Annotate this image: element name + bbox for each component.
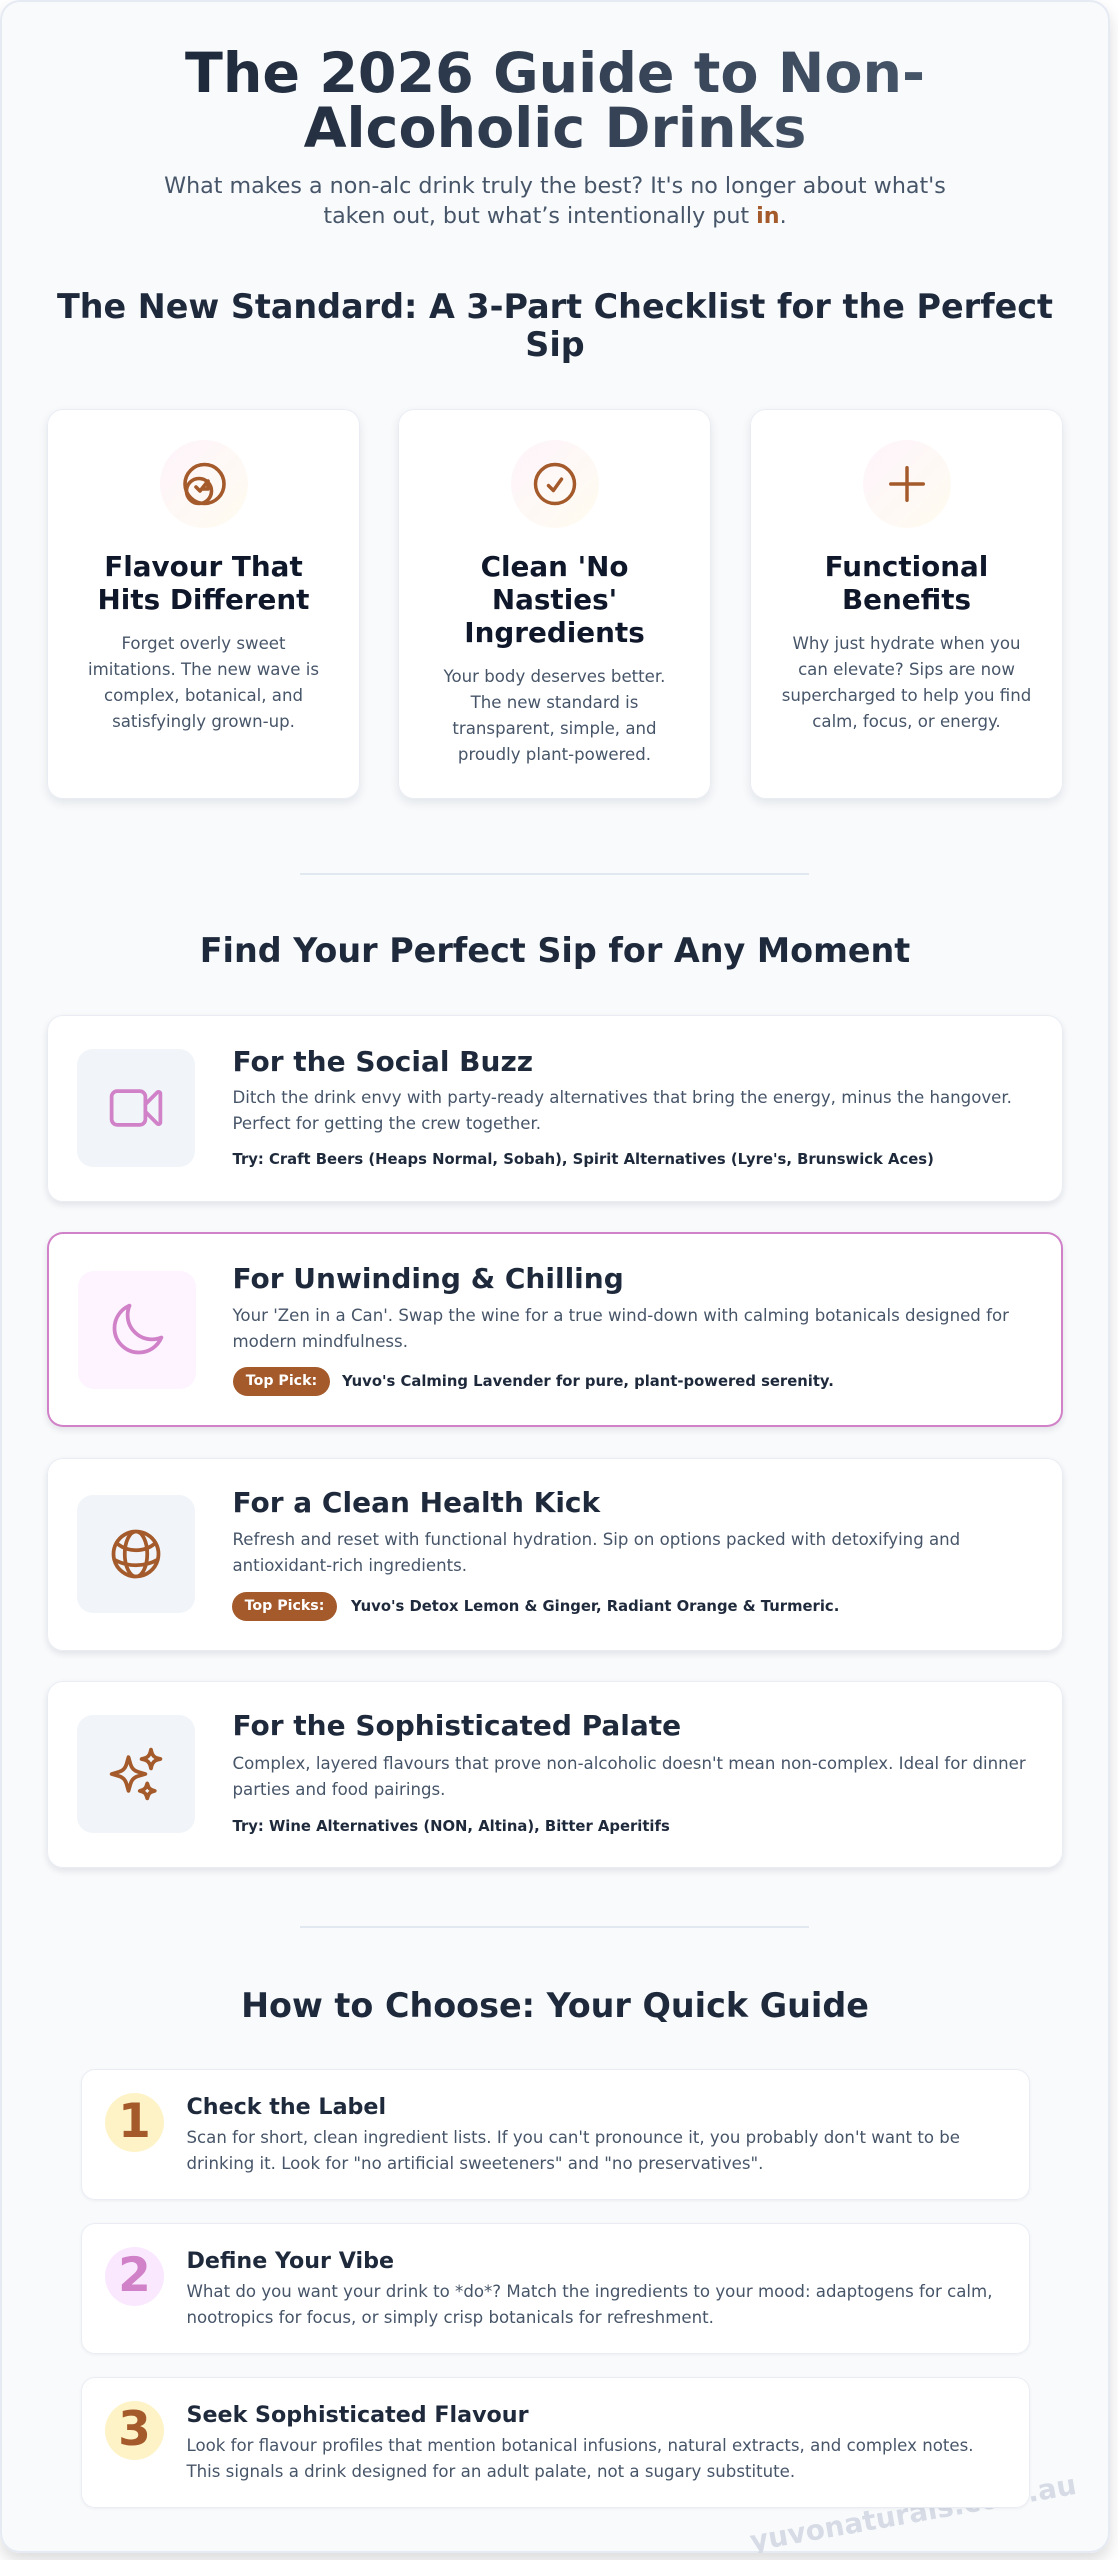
description: Your 'Zen in a Can'. Swap the wine for a true wind-down with calming botanicals designed for: [232, 1306, 1009, 1325]
description: [232, 1530, 960, 1575]
title: The 2026 Guide to Non-: [185, 41, 925, 106]
icon: flavour circle check: [160, 440, 248, 528]
icon background: [510, 440, 598, 528]
top pick badge: [233, 1367, 330, 1396]
card text: Why just hydrate when you: [792, 634, 1020, 653]
step text: What do you want your drink to *do*? Match the ingredients to your mood: adaptogens for calm,: [186, 2282, 992, 2301]
card heading: [98, 550, 309, 616]
top pick text: Yuvo's Calming Lavender for pure, plant-powered serenity.: [342, 1373, 834, 1390]
card text: can elevate? Sips are now: [798, 660, 1015, 679]
description: Ditch the drink envy with party-ready alternatives that bring the energy, minus the hangover.: [232, 1088, 1012, 1107]
heading: new standard: Sip: [525, 325, 585, 364]
card text: supercharged to help you find: [782, 686, 1031, 705]
card heading: [825, 550, 988, 616]
number 3: 3: [118, 2402, 151, 2456]
heading: new standard: [57, 287, 1053, 364]
step 1: [81, 2069, 1030, 2200]
number 1: 1: [118, 2094, 151, 2149]
card text: imitations. The new wave is: [88, 660, 319, 679]
panel: sophisticated palate: [47, 1681, 1063, 1868]
description: modern mindfulness.: [232, 1332, 408, 1351]
panel: flavour card: [47, 409, 360, 799]
heading: For Unwinding & Chilling: [232, 1262, 624, 1294]
icon: plus: [889, 466, 925, 502]
panel: unwinding highlighted: [47, 1232, 1063, 1427]
icon: check circle: [534, 462, 576, 506]
card heading: [464, 550, 645, 648]
heading: find your sip: Find Your Perfect Sip for Any Moment: [200, 931, 910, 970]
top picks text: Yuvo's Detox Lemon & Ginger, Radiant Orange & Turmeric.: [351, 1598, 839, 1615]
description: [232, 1306, 1009, 1351]
number 2: [105, 2247, 164, 2306]
description: [232, 1088, 1012, 1133]
number 1: [105, 2093, 164, 2152]
step 3: [81, 2376, 1030, 2508]
panel: clean ingredients card: [398, 409, 711, 799]
description: parties and food pairings.: [232, 1780, 445, 1799]
card heading: Clean 'No: [481, 550, 628, 582]
step text: Look for flavour profiles that mention botanical infusions, natural extracts, and complex notes.: [186, 2436, 974, 2454]
description: [232, 1754, 1026, 1799]
heading: new standard: The New Standard: A 3-Part Checklist for the Perfect: [57, 287, 1053, 326]
top pick badge: Top Pick:: [246, 1373, 317, 1389]
card text: [444, 667, 665, 764]
step text: [186, 2436, 974, 2480]
step 2: [81, 2223, 1030, 2354]
icon glyph: flavour: [183, 462, 226, 506]
card heading: Hits Different: [98, 582, 309, 616]
subtitle: What makes a non-alc drink truly the best? It's no longer about what's: [164, 173, 946, 199]
card text: Your body deserves better.: [444, 667, 665, 686]
card heading: Nasties': [492, 582, 617, 616]
card text: The new standard is: [471, 693, 638, 712]
title: Alcoholic Drinks: [304, 96, 806, 161]
panel: clean health kick: [47, 1458, 1063, 1651]
heading: how to choose: How to Choose: Your Quick Guide: [241, 1986, 869, 2024]
step heading: Define Your Vibe: [186, 2248, 394, 2274]
panel: functional benefits card: [750, 409, 1063, 799]
icon box: [78, 1271, 196, 1389]
number 3: [105, 2400, 164, 2460]
panel: social buzz: [47, 1015, 1063, 1202]
step text: This signals a drink designed for an adult palate, not a sugary substitute.: [186, 2462, 795, 2480]
card heading: Functional: [825, 550, 988, 582]
description: Perfect for getting the crew together.: [232, 1114, 541, 1133]
heading: For a Clean Health Kick: [232, 1486, 600, 1518]
step text: Scan for short, clean ingredient lists. If you can't pronounce it, you probably don't want to be: [186, 2128, 960, 2147]
card text: satisfyingly grown-up.: [112, 712, 295, 731]
step text: drinking it. Look for "no artificial sweeteners" and "no preservatives".: [186, 2154, 763, 2173]
try line: Try: Craft Beers (Heaps Normal, Sobah), Spirit Alternatives (Lyre's, Brunswick Aces): [232, 1151, 934, 1168]
step heading: Check the Label: [186, 2094, 386, 2120]
card heading: Flavour That: [104, 550, 303, 582]
card text: Forget overly sweet: [121, 634, 286, 653]
description: Refresh and reset with functional hydration. Sip on options packed with detoxifying and: [232, 1530, 960, 1549]
icon box: [77, 1049, 195, 1167]
top picks badge: [232, 1592, 337, 1621]
description: Complex, layered flavours that prove non-alcoholic doesn't mean non-complex. Ideal for dinner: [232, 1754, 1026, 1773]
icon background: [862, 440, 950, 528]
card text: calm, focus, or energy.: [812, 712, 1001, 731]
card text: transparent, simple, and: [452, 719, 657, 738]
card text: complex, botanical, and: [104, 686, 303, 705]
icon: sparkles: [110, 1748, 162, 1800]
icon box: [77, 1495, 195, 1613]
step heading: Seek Sophisticated Flavour: [186, 2402, 529, 2428]
number 2: 2: [118, 2248, 151, 2303]
card text: [88, 634, 319, 731]
card heading: Benefits: [842, 582, 971, 616]
step text: [186, 2282, 992, 2327]
subtitle: taken out, but what’s intentionally put in.: [323, 203, 787, 229]
card text: proudly plant-powered.: [458, 745, 651, 764]
heading: For the Social Buzz: [232, 1044, 533, 1078]
top picks badge: Top Picks:: [245, 1598, 324, 1614]
step text: nootropics for focus, or simply crisp botanicals for refreshment.: [186, 2308, 714, 2327]
card heading: Ingredients: [464, 616, 645, 648]
card text: [782, 634, 1031, 731]
description: antioxidant-rich ingredients.: [232, 1556, 467, 1575]
heading: For the Sophisticated Palate: [232, 1708, 681, 1742]
subtitle: [164, 173, 946, 229]
icon box: [77, 1715, 195, 1833]
title: [185, 41, 925, 161]
try line: Try: Wine Alternatives (NON, Altina), Bitter Aperitifs: [232, 1818, 670, 1835]
step text: [186, 2128, 960, 2173]
icon: moon: [112, 1304, 164, 1354]
icon: video camera: [110, 1089, 162, 1127]
icon: globe: [112, 1530, 160, 1578]
